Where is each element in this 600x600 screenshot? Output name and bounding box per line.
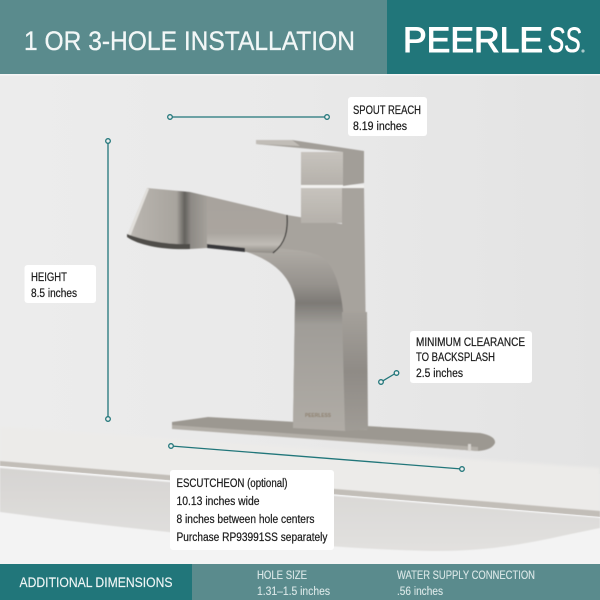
dimension line: spout reach	[168, 115, 329, 119]
footer: water supply connection: .56 inches	[397, 586, 443, 598]
faucet body	[247, 188, 367, 430]
callout: spout reach	[348, 97, 427, 136]
dimension line: height	[106, 139, 110, 421]
pull-out wand	[207, 196, 287, 253]
header bar right: logo	[387, 0, 600, 74]
callout: height: HEIGHT	[31, 272, 67, 284]
callout: minimum clearance: TO BACKSPLASH	[416, 352, 495, 364]
footer heading: ADDITIONAL DIMENSIONS	[20, 575, 172, 590]
title: 1 OR 3-HOLE INSTALLATION	[24, 26, 355, 56]
header bar right: logo: SS	[548, 21, 581, 60]
callout: spout reach: SPOUT REACH	[353, 105, 421, 117]
lever handle	[256, 140, 364, 186]
callout: minimum clearance	[410, 331, 532, 383]
curved neck front	[247, 248, 345, 431]
header bar left	[0, 0, 387, 74]
callout: spout reach: 8.19 inches	[353, 121, 407, 133]
header bar right: logo: PEERLE	[403, 21, 543, 60]
spray head	[127, 188, 207, 249]
callout: minimum clearance: MINIMUM CLEARANCE	[416, 337, 525, 349]
callout: minimum clearance: 2.5 inches	[416, 368, 463, 380]
base logo: PEERLESS	[305, 413, 332, 419]
background: countertop	[0, 427, 600, 565]
footer bar	[0, 564, 600, 600]
footer: hole size: HOLE SIZE	[257, 570, 307, 582]
footer: water supply connection	[397, 570, 535, 598]
footer: hole size	[257, 570, 330, 598]
footer: hole size: 1.31–1.5 inches	[257, 586, 330, 598]
background: wall	[0, 74, 600, 474]
callout: escutcheon	[170, 470, 334, 550]
callout: height	[24, 265, 96, 303]
callout: escutcheon: 10.13 inches wide	[176, 496, 260, 508]
dimension line: escutcheon	[169, 444, 464, 471]
faucet	[127, 140, 368, 431]
callout: escutcheon: 8 inches between hole centers	[176, 514, 315, 526]
callout: escutcheon: Purchase RP93991SS separately	[176, 532, 328, 544]
callout: height: 8.5 inches	[31, 288, 77, 300]
upper body block	[301, 188, 342, 223]
escutcheon plate	[172, 417, 495, 451]
callout: escutcheon: ESCUTCHEON (optional)	[176, 478, 288, 490]
dimension line: clearance	[379, 371, 399, 384]
footer: water supply connection: WATER SUPPLY CONNECTION	[397, 570, 535, 582]
